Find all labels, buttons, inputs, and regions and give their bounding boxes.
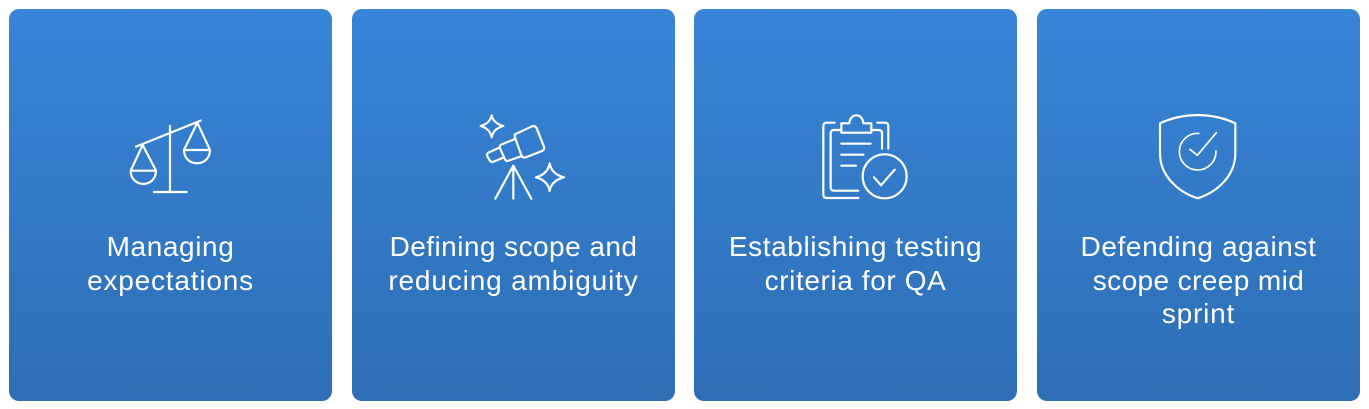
- heading: sprint: [1162, 298, 1235, 329]
- panel: managing expectations: [9, 9, 332, 401]
- icon: balance scale: [130, 120, 212, 194]
- heading: Establishing testing: [729, 231, 982, 262]
- panel: testing criteria: [694, 9, 1017, 401]
- icon: shield with check: [1158, 114, 1236, 200]
- heading: scope creep mid: [1093, 264, 1304, 296]
- heading: [87, 231, 254, 296]
- heading: [729, 231, 982, 296]
- heading: reducing ambiguity: [388, 264, 639, 296]
- heading: expectations: [87, 264, 254, 296]
- panel: defining scope: [352, 9, 675, 401]
- heading: Defending against: [1081, 231, 1316, 262]
- heading: [388, 231, 639, 296]
- panel: defending against scope creep: [1037, 9, 1360, 401]
- icon: telescope and stars: [480, 114, 565, 200]
- heading: [1081, 231, 1316, 329]
- heading: Managing: [107, 231, 234, 262]
- heading: Defining scope and: [390, 231, 637, 262]
- icon: clipboard with check: [822, 114, 908, 200]
- heading: criteria for QA: [765, 264, 946, 296]
